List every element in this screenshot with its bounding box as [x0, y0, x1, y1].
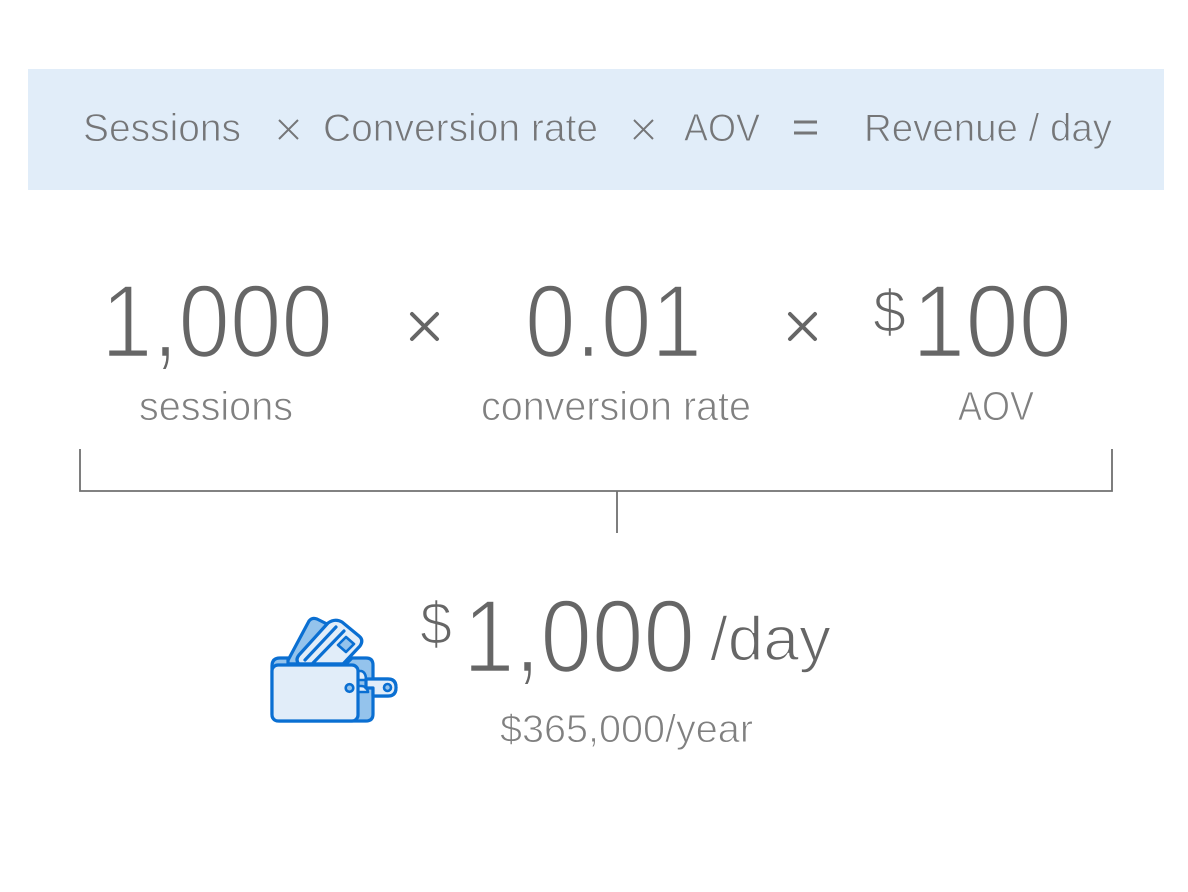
revenue per day [420, 579, 831, 695]
sessions value [101, 264, 333, 429]
revenue per day: $ [420, 590, 452, 657]
sessions value: 1,000 [101, 264, 333, 380]
AOV value: 100 [912, 264, 1072, 380]
back card [286, 618, 327, 664]
sessions value: sessions [139, 383, 293, 429]
conversion rate value: 0.01 [525, 264, 702, 380]
formula banner: Sessions [83, 107, 241, 150]
formula banner: Conversion rate [323, 107, 598, 150]
formula banner [28, 69, 1164, 190]
conversion rate value [481, 264, 751, 429]
conversion rate value: conversion rate [481, 383, 751, 429]
formula banner: Revenue / day [864, 107, 1112, 150]
multiply sign 2 [790, 314, 815, 339]
wallet front [272, 665, 358, 721]
wallet strap [360, 679, 396, 696]
revenue per day: 1,000 [463, 579, 695, 695]
bracket [80, 449, 1112, 533]
formula banner: AOV [684, 107, 760, 150]
multiply sign 1 [412, 314, 437, 339]
revenue per day: /day [710, 605, 831, 674]
revenue per year: $365,000/year [500, 708, 753, 751]
AOV value: $ [873, 278, 906, 345]
wallet back [272, 658, 373, 721]
front card [297, 620, 362, 664]
icon: wallet [272, 618, 396, 721]
wallet strap front [366, 679, 396, 696]
AOV value [873, 264, 1072, 429]
AOV value: AOV [958, 383, 1035, 429]
